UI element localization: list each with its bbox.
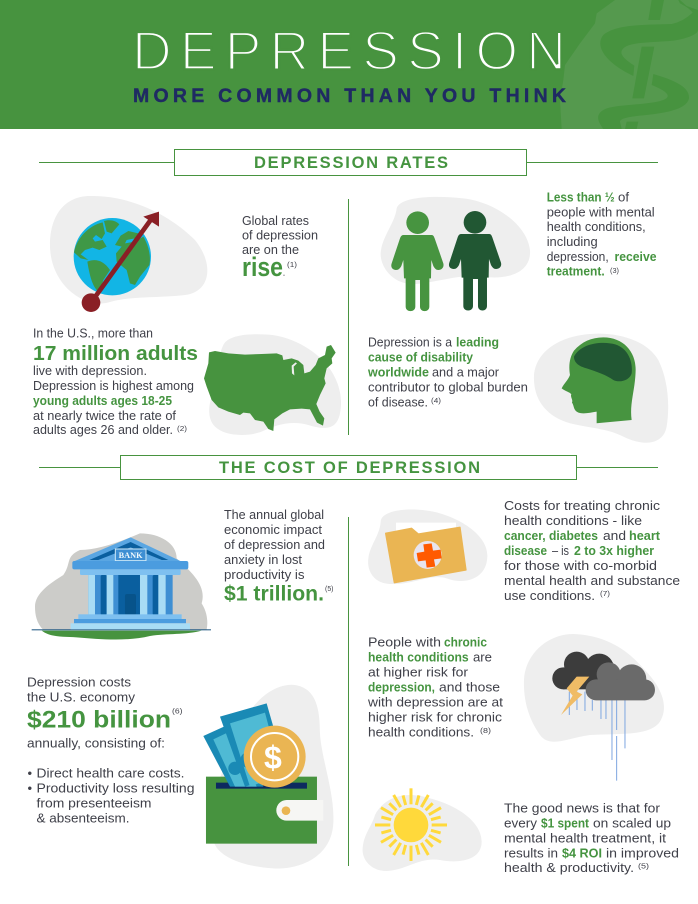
text: good news ROI: mental health treatment, it [504, 831, 666, 846]
heading: depression rates [39, 150, 658, 176]
text: chronic health risk: depression, [368, 680, 435, 695]
text: $1 trillion: economic impact [224, 522, 322, 537]
text: good news ROI: The good news is that for [504, 801, 661, 816]
text: chronic costs: use conditions. [504, 588, 595, 603]
text: global rates: Global rates [242, 213, 309, 228]
icon: caduceus watermark [560, 0, 698, 129]
text: chronic health risk: are [473, 650, 492, 665]
text: $210 billion: (6) [172, 706, 183, 716]
text: chronic costs: Costs for treating chronic [504, 498, 661, 513]
text: $210 billion: Depression costs [27, 675, 132, 690]
text: chronic costs: 2 to 3x higher [574, 543, 654, 558]
text: chronic costs: (7) [600, 589, 611, 598]
text: 17 million adults: (2) [177, 424, 188, 433]
text: $210 billion: Direct health care costs. [36, 766, 184, 781]
text: leading cause: and a major [432, 365, 500, 380]
text: leading cause: Depression is a [368, 335, 453, 350]
text: chronic costs: cancer, diabetes [504, 528, 598, 543]
text: 17 million adults [33, 326, 198, 437]
text: $1 trillion [224, 507, 334, 606]
text: chronic health risk [367, 635, 503, 740]
text: less than half receive treatment: Less than ½ [547, 190, 615, 205]
text: chronic costs: – is [552, 543, 569, 558]
text: 17 million adults: Depression is highest among [33, 378, 194, 393]
text: leading cause: worldwide [367, 365, 429, 380]
subtitle: MORE COMMON THAN YOU THINK [133, 85, 566, 107]
icon: sun [363, 788, 482, 871]
text: leading cause: contributor to global burden [368, 380, 528, 395]
panel: US economy cost [27, 675, 333, 868]
icon: bank [32, 533, 211, 640]
text: good news ROI: results in [504, 846, 558, 861]
text: $210 billion: • [28, 766, 32, 781]
text: chronic costs: heart [629, 528, 661, 543]
icon: two people [381, 197, 530, 311]
text: 17 million adults: at nearly twice the rate of [33, 408, 176, 423]
text: less than half receive treatment: receive [614, 249, 656, 264]
text: $1 trillion: productivity is [224, 567, 305, 582]
text: good news ROI: $1 spent [541, 816, 590, 831]
text: good news ROI: health & productivity. [504, 860, 634, 875]
icon: wallet with money: $ [264, 739, 282, 775]
text: leading cause: cause of disability [368, 350, 474, 365]
text: chronic health risk: health conditions [368, 650, 469, 665]
heading: the cost of depression: THE COST OF DEPRESSION [219, 459, 480, 477]
icon: wallet with money [203, 685, 333, 868]
text: $1 trillion: anxiety in lost [224, 552, 302, 567]
text: less than half receive treatment: health conditions, [547, 219, 646, 234]
icon: US map [204, 334, 341, 435]
panel: US adults [33, 326, 341, 437]
icon: globe with rising arrow [50, 196, 207, 312]
panel: global rates [50, 196, 318, 312]
icon: storm clouds [524, 634, 664, 781]
heading: depression rates: DEPRESSION RATES [254, 154, 448, 172]
text: good news ROI: on scaled up [593, 816, 671, 831]
text: $1 trillion: (5) [325, 584, 334, 593]
icon: medical folder [368, 510, 487, 584]
panel: risk of depression [363, 634, 679, 875]
text: chronic costs: mental health and substance [504, 573, 680, 588]
header banner [0, 0, 698, 129]
text: $210 billion: & absenteeism. [36, 811, 130, 826]
text: leading cause: of disease. [368, 395, 428, 410]
text: global rates: are on the [242, 242, 299, 257]
text: leading cause: (4) [431, 396, 442, 405]
text: chronic costs [504, 498, 680, 603]
text: $210 billion: • [28, 781, 32, 796]
panel: treatment [381, 190, 656, 311]
text: 17 million adults: In the U.S., more than [33, 326, 153, 341]
text: $210 billion: annually, consisting of: [27, 736, 165, 751]
text: $210 billion: from presenteeism [36, 796, 152, 811]
text: good news ROI: every [504, 816, 538, 831]
text: global rates: . [283, 264, 285, 279]
text: 17 million adults: 17 million adults [33, 342, 198, 365]
text: chronic health risk: chronic [444, 635, 487, 650]
text: chronic health risk: health conditions. [368, 725, 474, 740]
text: less than half receive treatment: depression, [547, 249, 609, 264]
panel: chronic condition costs [368, 498, 680, 603]
text: chronic health risk: (8) [480, 726, 492, 735]
heading: the cost of depression [39, 456, 658, 480]
panel: global economic impact [32, 507, 334, 640]
text: less than half receive treatment: (3) [610, 266, 619, 275]
text: $210 billion: $210 billion [27, 707, 171, 734]
text: good news ROI [504, 801, 679, 875]
icon: bank: BANK [119, 551, 143, 560]
text: chronic costs: and [603, 528, 626, 543]
text: $210 billion: the U.S. economy [27, 690, 136, 705]
text: leading cause: leading [456, 335, 499, 350]
text: $1 trillion: The annual global [224, 507, 324, 522]
text: chronic health risk: People with [368, 635, 441, 650]
text: chronic costs: for those with co-morbid [504, 558, 657, 573]
text: $1 trillion: $1 trillion. [224, 582, 324, 606]
text: good news ROI: $4 ROI [562, 846, 602, 861]
text: less than half receive treatment: treatment. [547, 264, 605, 279]
text: less than half receive treatment: of [618, 190, 629, 205]
text: $1 trillion: of depression and [224, 537, 325, 552]
panel: leading cause of disability [367, 334, 668, 443]
text: less than half receive treatment: including [547, 234, 598, 249]
text: leading cause [367, 335, 528, 410]
text: 17 million adults: young adults ages 18-25 [33, 393, 172, 408]
text: 17 million adults: live with depression. [33, 363, 147, 378]
text: less than half receive treatment [547, 190, 656, 279]
text: chronic costs: health conditions - like [504, 513, 642, 528]
text: 17 million adults: adults ages 26 and older. [33, 422, 173, 437]
text: chronic health risk: higher risk for chronic [368, 710, 503, 725]
text: $210 billion [27, 675, 194, 826]
text: global rates: (1) [287, 260, 298, 269]
text: chronic costs: disease [504, 543, 547, 558]
text: less than half receive treatment: people with mental [547, 205, 655, 220]
text: good news ROI: (5) [638, 862, 650, 870]
text: global rates: rise [242, 252, 283, 282]
text: $210 billion: Productivity loss resulting [36, 781, 194, 796]
text: chronic health risk: at higher risk for [368, 665, 469, 680]
text: chronic health risk: and those [439, 680, 500, 695]
text: chronic health risk: with depression are at [367, 695, 503, 710]
text: global rates: of depression [242, 228, 318, 242]
icon: head with brain [534, 334, 668, 443]
title: DEPRESSION [132, 20, 566, 82]
text: good news ROI: in improved [606, 846, 679, 861]
text: global rates [242, 213, 318, 282]
